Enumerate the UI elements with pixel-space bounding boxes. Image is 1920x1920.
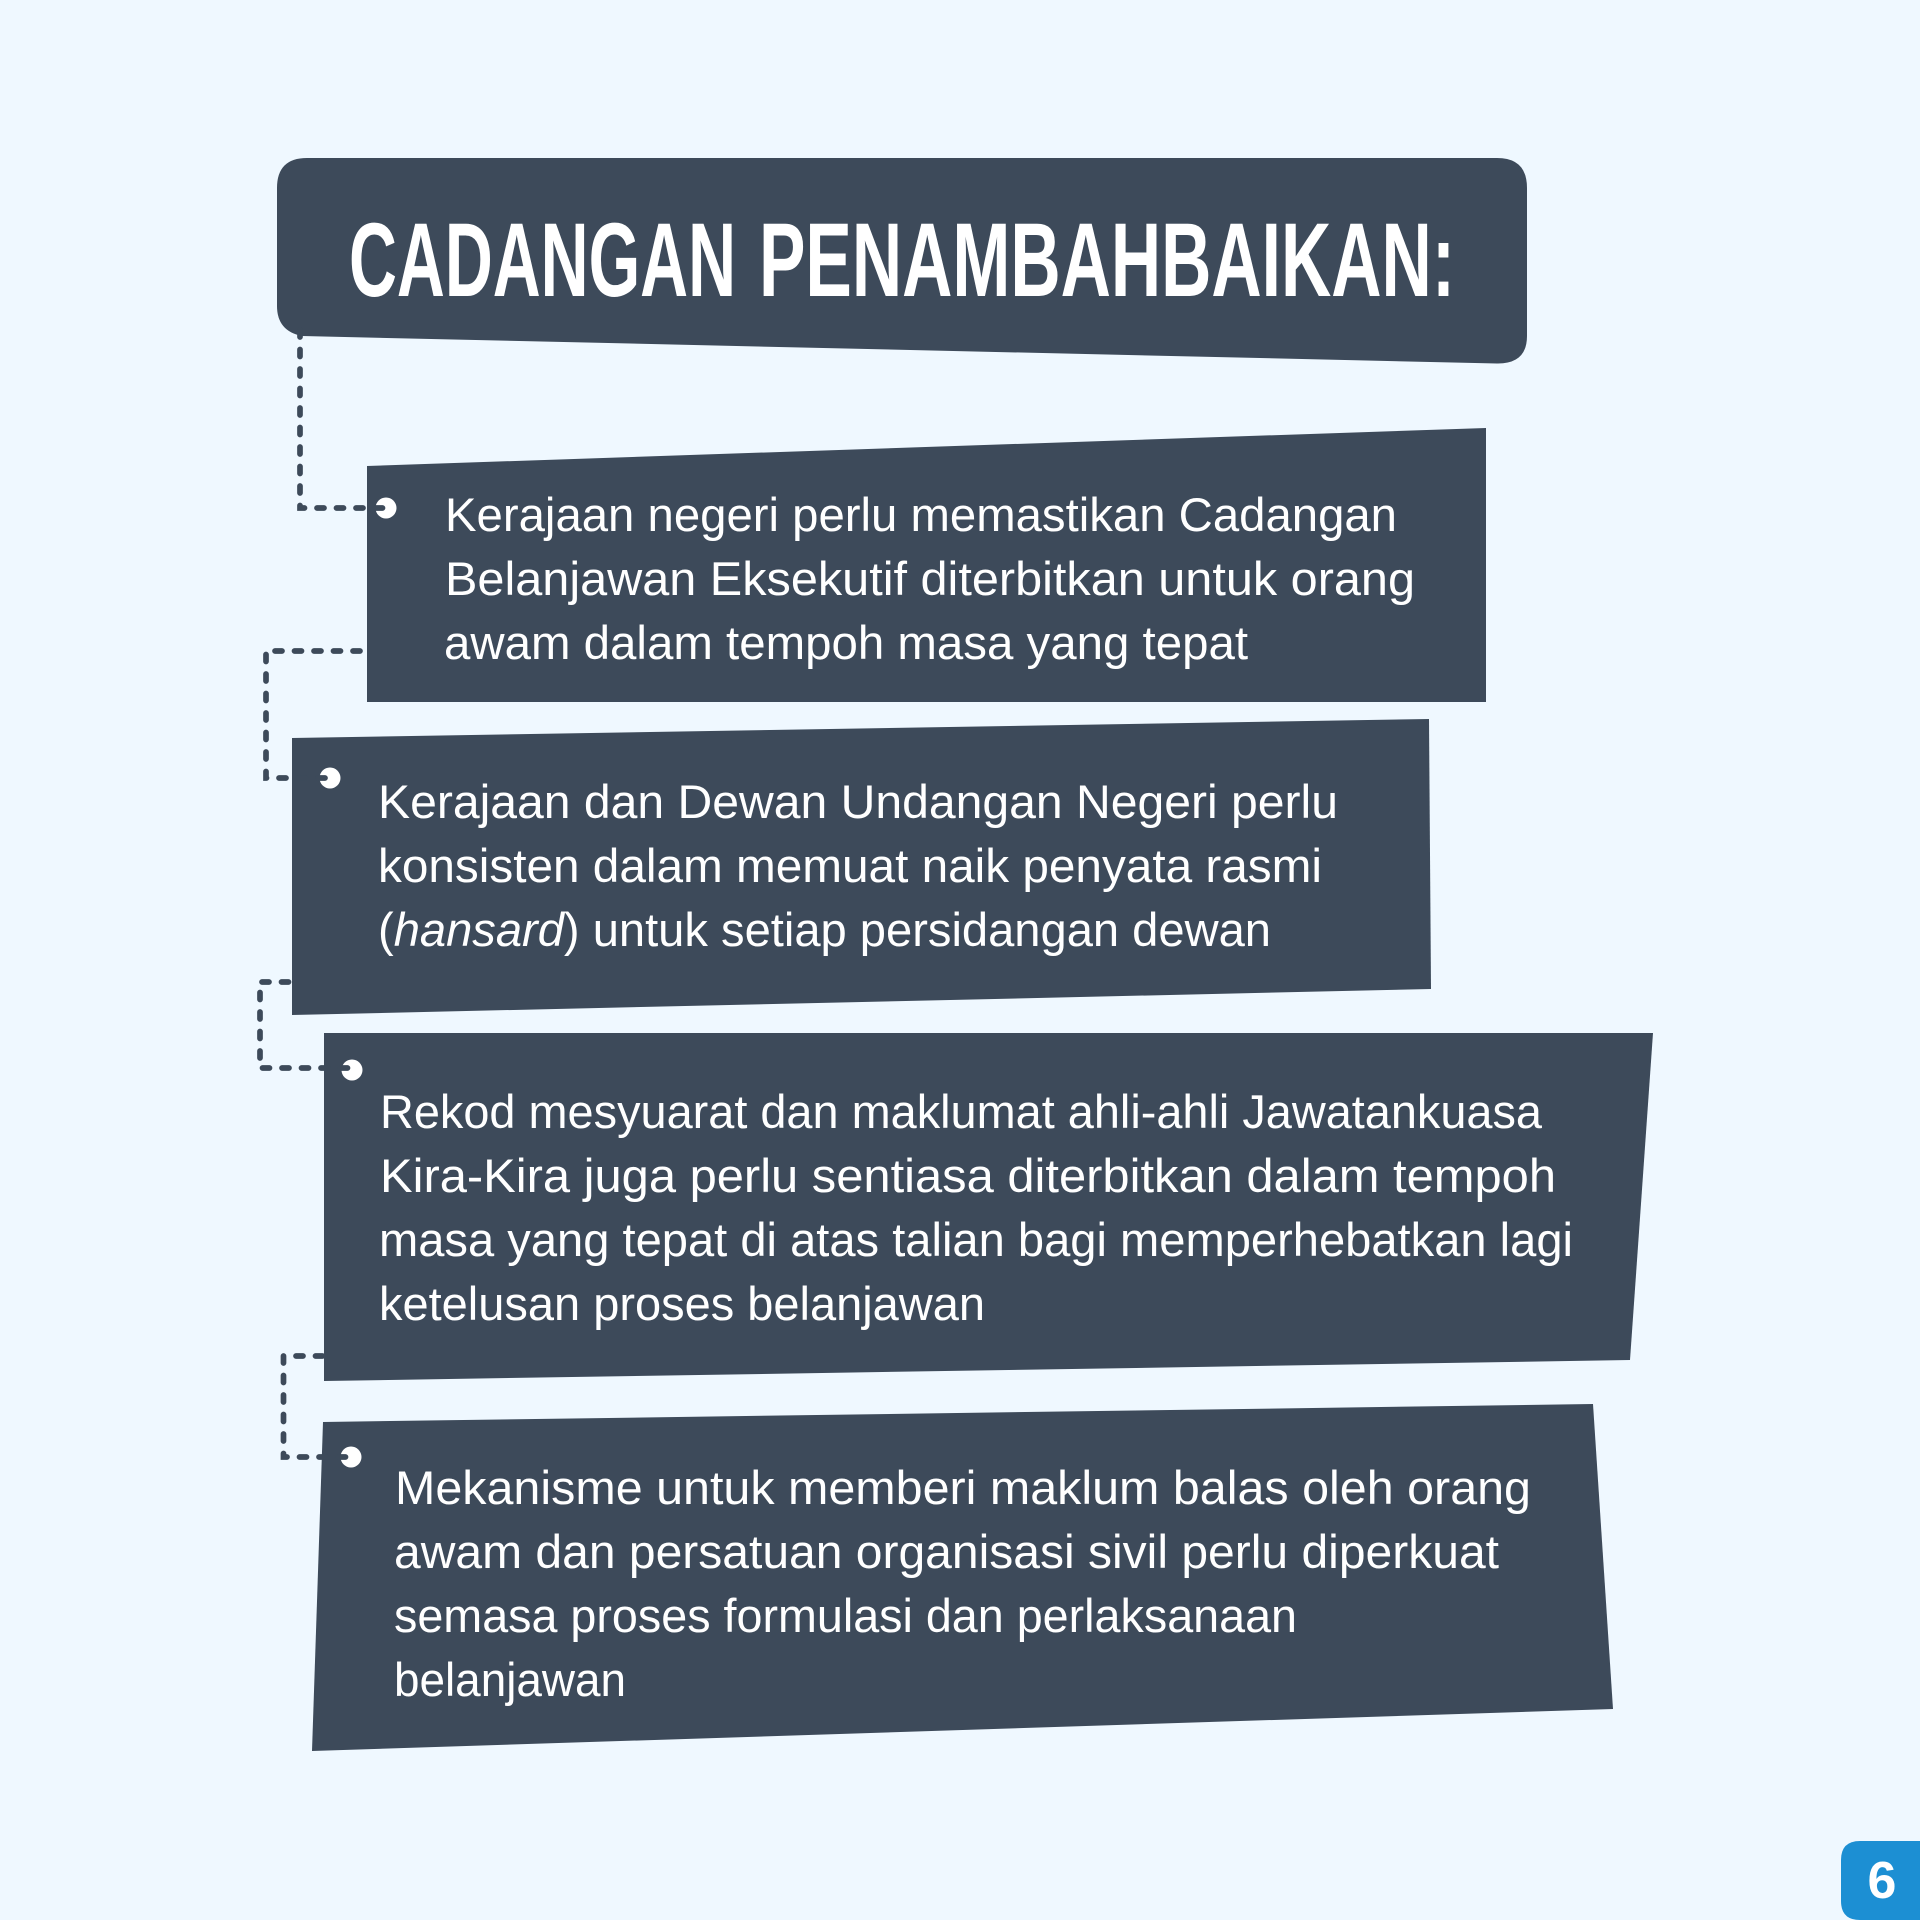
panel: recommendation 1 (367, 428, 1486, 702)
title (349, 202, 1455, 319)
bullet 1 (376, 498, 396, 518)
text: recommendation 3: ketelusan proses belanjawan (379, 1277, 985, 1330)
title: CADANGAN (349, 202, 736, 319)
bullet 4 (340, 1446, 362, 1468)
text: recommendation 2 (378, 775, 1338, 956)
panel: recommendation 4 (312, 1404, 1613, 1751)
bullet 3 (342, 1060, 362, 1080)
panel: recommendation 2 (292, 719, 1431, 1015)
text: recommendation 4: semasa proses formulasi dan perlaksanaan (394, 1589, 1297, 1642)
connector: panel 1 to panel 2 (266, 651, 360, 778)
text: recommendation 1: Kerajaan negeri perlu memastikan Cadangan (445, 488, 1397, 541)
text: recommendation 3: Rekod mesyuarat dan maklumat ahli-ahli Jawatankuasa (380, 1085, 1543, 1138)
page number badge (1841, 1841, 1920, 1920)
text: recommendation 4: awam dan persatuan organisasi sivil perlu diperkuat (394, 1525, 1499, 1578)
text: recommendation 2: konsisten dalam memuat naik penyata rasmi (378, 839, 1322, 892)
text: recommendation 2: (hansard) untuk setiap persidangan dewan (378, 903, 1271, 956)
text: recommendation 1: Belanjawan Eksekutif diterbitkan untuk orang (445, 552, 1415, 605)
text: recommendation 3: Kira-Kira juga perlu sentiasa diterbitkan dalam tempoh (380, 1149, 1556, 1202)
text: recommendation 2: Kerajaan dan Dewan Undangan Negeri perlu (378, 775, 1338, 828)
panel: recommendation 3 (324, 1033, 1653, 1381)
connector: header to panel 1 (300, 330, 386, 508)
text: recommendation 1: awam dalam tempoh masa yang tepat (444, 616, 1248, 669)
text: recommendation 4: Mekanisme untuk memberi maklum balas oleh orang (395, 1461, 1531, 1514)
text: recommendation 1 (444, 488, 1415, 669)
connector: panel 3 to panel 4 (284, 1356, 351, 1457)
page number: 6 (1868, 1852, 1896, 1910)
header banner (277, 158, 1527, 364)
bullet 2 (320, 768, 340, 788)
text: recommendation 3: masa yang tepat di atas talian bagi memperhebatkan lagi (379, 1213, 1573, 1266)
text: recommendation 3 (379, 1085, 1573, 1330)
text: recommendation 4 (394, 1461, 1531, 1706)
connector: panel 2 to panel 3 (260, 982, 352, 1068)
title: PENAMBAHBAIKAN: (759, 202, 1455, 319)
text: recommendation 4: belanjawan (394, 1653, 626, 1706)
